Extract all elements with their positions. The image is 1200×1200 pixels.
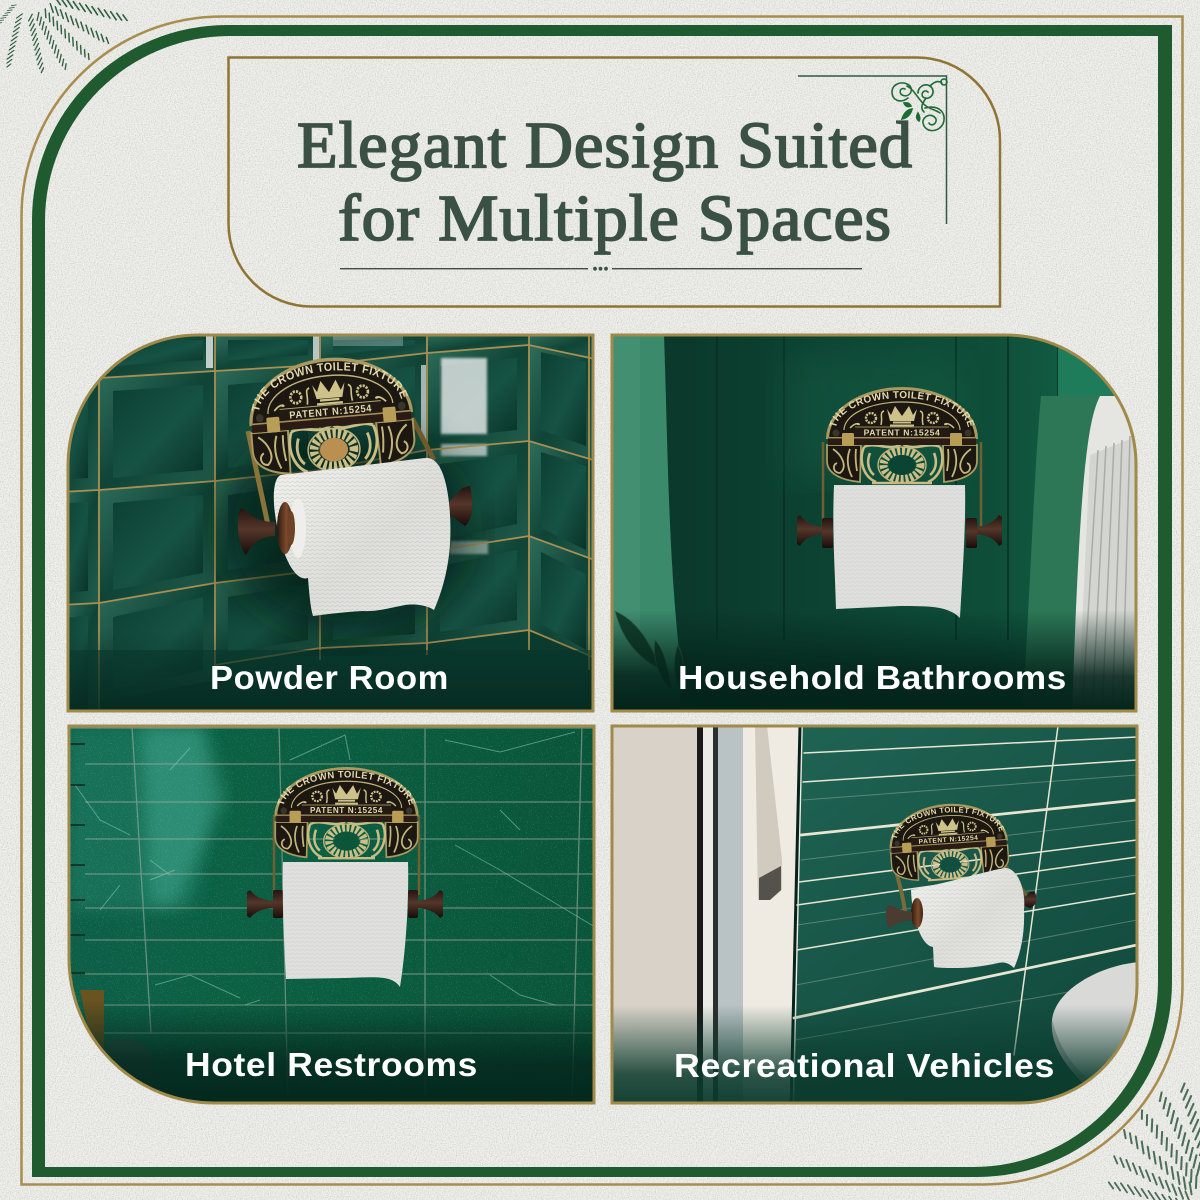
product: toilet roll holder: PATENT N:15254 bbox=[289, 403, 373, 422]
title panel bbox=[228, 58, 1000, 306]
plant leaves bbox=[614, 610, 684, 680]
product: toilet roll holder: THE CROWN TOILET FIXTURE bbox=[892, 806, 1004, 838]
shadow behind holder bbox=[220, 425, 470, 635]
corner rule lines bbox=[798, 76, 946, 224]
bottom-left fixtures bbox=[80, 990, 104, 1048]
side box and radiator bbox=[1026, 396, 1100, 668]
marble veins bbox=[75, 732, 600, 1005]
panel: Hotel Restrooms bbox=[68, 724, 596, 1104]
photo: green bevelled tile wall with toilet roll holder bbox=[70, 336, 592, 710]
palm frond decoration: top left corner bbox=[0, 0, 128, 73]
photo: RV wall with door frame and green tile bbox=[614, 728, 1136, 1102]
tile grout lines bbox=[60, 335, 600, 712]
left edge tile stubs bbox=[70, 743, 85, 974]
panel border bbox=[68, 335, 593, 711]
icon: corner ornament scrollwork bbox=[892, 79, 947, 131]
palm frond decoration: bottom right corner bbox=[1108, 1083, 1200, 1200]
title heading: for Multiple Spaces bbox=[338, 182, 892, 255]
panel seams bbox=[717, 335, 1058, 640]
product: toilet roll holder: PATENT N:15254 bbox=[918, 835, 979, 846]
door frame bbox=[610, 720, 698, 1110]
tile lines bbox=[794, 726, 1137, 1055]
panel: Recreational Vehicles bbox=[610, 724, 1138, 1104]
caption: Powder Room: Powder Room bbox=[210, 659, 449, 696]
product: toilet roll holder: PATENT N:15254 bbox=[864, 428, 940, 438]
bottom shade bbox=[614, 1008, 1133, 1102]
caption: Hotel Restrooms: Hotel Restrooms bbox=[185, 1046, 478, 1083]
product: toilet roll holder: PATENT N:15254 bbox=[310, 806, 383, 815]
tile highlights bbox=[206, 336, 488, 554]
caption: Recreational Vehicles: Recreational Vehicles bbox=[674, 1047, 1055, 1084]
product: toilet roll holder bbox=[797, 387, 1002, 618]
panel border bbox=[612, 335, 1136, 711]
title heading bbox=[297, 109, 913, 255]
bottom shade bbox=[610, 610, 1140, 715]
panel: Household Bathrooms bbox=[610, 334, 1138, 712]
title heading: Elegant Design Suited bbox=[297, 109, 913, 182]
bottom shade bbox=[80, 1005, 592, 1102]
panel border bbox=[612, 726, 1137, 1103]
product: toilet roll holder: THE CROWN TOILET FIXTURE bbox=[252, 362, 408, 411]
product: toilet roll holder bbox=[238, 358, 472, 616]
product: toilet roll holder: THE CROWN TOILET FIXTURE bbox=[277, 770, 416, 806]
bottom shade bbox=[70, 636, 592, 710]
caption: Household Bathrooms: Household Bathrooms bbox=[678, 659, 1067, 696]
photo: dark green panelled wall with toilet roll holder bbox=[614, 336, 1134, 710]
product: toilet roll holder bbox=[247, 767, 443, 987]
panel: Powder Room bbox=[66, 334, 594, 712]
product: toilet roll holder bbox=[886, 804, 1036, 968]
title panel gold outline bbox=[228, 58, 1000, 306]
photo: green marble brick tile wall with toilet roll holder bbox=[70, 728, 592, 1102]
title divider with dots bbox=[340, 267, 862, 271]
panel border bbox=[69, 726, 594, 1103]
toilet bbox=[1052, 962, 1136, 1078]
product: toilet roll holder: THE CROWN TOILET FIXTURE bbox=[829, 391, 974, 428]
door handle bbox=[755, 726, 782, 900]
tile grout lines bbox=[68, 726, 594, 1103]
